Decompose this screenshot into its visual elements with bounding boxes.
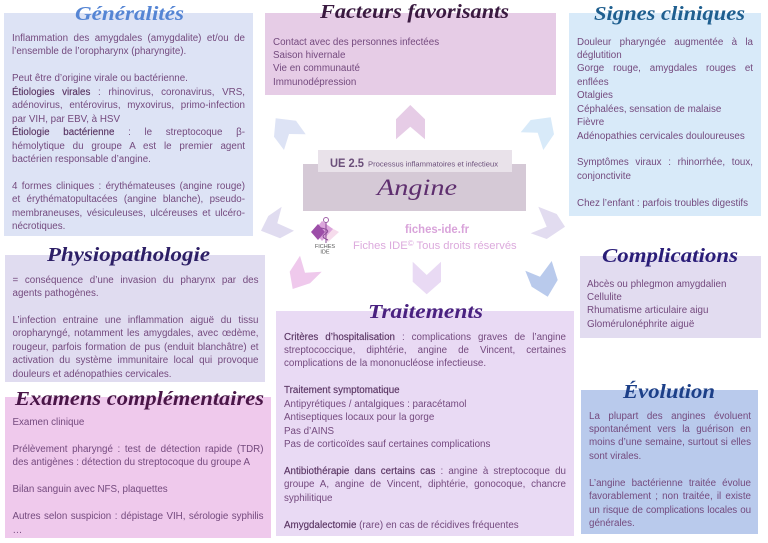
text: Examens complémentaires body: Bilan sanguin avec NFS, plaquettes	[12, 484, 168, 495]
text: Signes cliniques body: Adénopathies cervicales douloureuses	[577, 131, 745, 142]
text: Examens complémentaires body: Prélèvement pharyngé : test de détection rapide (TDR)	[12, 444, 264, 455]
text: Généralités body: adénovirus, entérovirus, myxovirus, primo-infection	[12, 100, 245, 111]
text: Facteurs favorisants body: Immunodépression	[273, 77, 356, 88]
panel: Complications	[580, 245, 761, 338]
heading: Généralités: Généralités	[75, 3, 184, 25]
arrow: bottom centre	[413, 262, 441, 294]
heading: Signes cliniques: Signes cliniques	[594, 3, 745, 25]
arrow: top left	[274, 118, 306, 150]
text: Traitements body: streptococcique, diphtérie, angine de Vincent, certaines	[284, 345, 566, 356]
text: Complications body: Rhumatisme articulaire aigu	[587, 305, 708, 316]
text: Évolution body: favorablement ; non traitée, il existe	[589, 491, 751, 502]
panel: Traitements	[276, 301, 574, 536]
text: Signes cliniques body: Céphalées, sensation de malaise	[577, 104, 721, 115]
arrow: left	[261, 207, 294, 238]
arrow: right	[531, 207, 565, 239]
text: Généralités body: 4 formes cliniques : érythémateuses (angine rouge)	[12, 181, 245, 192]
text: Signes cliniques body: Douleur pharyngée augmentée à la	[577, 36, 753, 48]
text: Facteurs favorisants body: Saison hivernale	[273, 50, 345, 61]
panel: Signes cliniques	[569, 3, 761, 216]
text: Traitements body: Critères d’hospitalisation : complications graves de l’angine	[284, 332, 566, 342]
credit text: Fiches IDE	[353, 240, 408, 252]
text: Complications body: Cellulite	[587, 292, 622, 303]
panel: Examens complémentaires	[5, 388, 271, 538]
text: Généralités body: Inflammation des amygdales (amygdalite) et/ou de	[12, 33, 245, 44]
arrow: top right	[521, 117, 554, 150]
panel: Généralités	[4, 3, 253, 236]
text: Traitements body: Pas d’AINS	[284, 426, 334, 437]
text: Évolution body: La plupart des angines évoluent	[589, 410, 751, 422]
text: Traitements body: syphilitique	[284, 493, 332, 504]
icon: Fiches IDE logo: FICHES	[315, 244, 335, 250]
text: Généralités body: Peut être d’origine virale ou bactérienne.	[12, 73, 188, 84]
text: Généralités body: et érythématopultacées (angine blanche), pseudo-	[12, 194, 245, 205]
credit text	[353, 224, 517, 252]
icon: Fiches IDE logo	[311, 217, 339, 256]
text: Examens complémentaires body: Examen clinique	[12, 417, 84, 428]
text: Signes cliniques body: conjonctivite	[577, 171, 631, 182]
text: Physiopathologie body: L’infection entraine une inflammation aiguë du tissu	[12, 315, 258, 326]
text: Traitements body	[284, 332, 566, 531]
text: Traitements body: groupe A, angine de Vincent, diphtérie, gonocoque, chancre	[284, 479, 566, 490]
text: Généralités body: bactérien responsable d’angine.	[12, 154, 151, 165]
text: Facteurs favorisants body: Vie en communauté	[273, 63, 360, 74]
text: Généralités body: nécrotiques.	[12, 221, 65, 232]
text: Traitements body: Amygdalectomie (rare) en cas de récidives fréquentes	[284, 520, 519, 531]
text: Physiopathologie body: douleurs et adénopathies cervicales.	[12, 369, 172, 380]
text: Évolution body	[589, 410, 751, 529]
text: Évolution body: générales.	[589, 518, 635, 529]
text: Évolution body: sont virales.	[589, 451, 641, 462]
text: Physiopathologie body: rougeur, parfois formation de pus (enduit blanchâtre) et	[12, 342, 258, 353]
text: Traitements body: Pas de corticoïdes sauf certaines complications	[284, 439, 490, 450]
text: Généralités body: hémolytique du groupe A est le premier agent	[12, 140, 245, 152]
panel: Physiopathologie	[5, 244, 265, 382]
panel: Évolution	[581, 380, 758, 534]
text: Généralités body: l’ensemble de l’oropharynx (pharyngite).	[12, 46, 186, 57]
text: Évolution body: L’angine bactérienne traitée évolue	[589, 478, 751, 489]
text: Examens complémentaires body	[12, 417, 264, 536]
heading: Évolution: Évolution	[622, 380, 715, 403]
unit label: UE 2.5	[330, 158, 499, 200]
heading: Facteurs favorisants: Facteurs favorisants	[319, 1, 509, 23]
text: Signes cliniques body: Symptômes viraux : rhinorrhée, toux,	[577, 157, 753, 168]
text: Physiopathologie body: activation du système immunitaire local qui provoque	[12, 355, 258, 366]
text: Complications body: Glomérulonéphrite aiguë	[587, 319, 694, 330]
text: Traitements body: complications de la mononucléose infectieuse.	[284, 358, 486, 369]
text: Signes cliniques body: Chez l’enfant : parfois troubles digestifs	[577, 198, 748, 209]
credit text: Tous droits réservés	[414, 240, 517, 252]
text: Traitements body: Traitement symptomatique	[284, 385, 400, 396]
text: Complications body	[587, 278, 726, 330]
text: Examens complémentaires body: Autres selon suspicion : dépistage VIH, sérologie syphilis	[12, 511, 264, 522]
text: Traitements body: Antipyrétiques / antalgiques : paracétamol	[284, 399, 466, 410]
text: Signes cliniques body: déglutition	[577, 50, 622, 61]
credit text: ©	[408, 239, 414, 248]
arrow: top centre	[396, 105, 425, 139]
text: Examens complémentaires body: …	[12, 524, 22, 536]
text: Généralités body	[12, 33, 245, 232]
icon: Fiches IDE logo: IDE	[320, 250, 330, 256]
text: Traitements body: Antibiothérapie dans certains cas : angine à streptocoque du	[284, 466, 566, 477]
text: Signes cliniques body: Otalgies	[577, 90, 613, 101]
text: Examens complémentaires body: des antigènes : détection du streptocoque du groupe A	[12, 457, 250, 468]
text: Évolution body: un risque de complications locales ou	[589, 505, 751, 516]
credit text: fiches-ide.fr	[405, 224, 470, 236]
unit label: UE 2.5: Processus inflammatoires et infectieux	[368, 162, 499, 168]
heading: Traitements: Traitements	[368, 301, 483, 323]
text: Physiopathologie body: = conséquence d’une invasion du pharynx par des	[12, 274, 258, 286]
text: Physiopathologie body: agents pathogènes.	[12, 288, 99, 299]
text: Signes cliniques body: Gorge rouge, amygdales rouges et	[577, 63, 753, 74]
text: Signes cliniques body: enflées	[577, 77, 609, 88]
text: Généralités body: membraneuses, vésiculeuses, ulcéreuses et ulcéro-	[12, 208, 245, 219]
unit label: UE 2.5: Angine	[375, 175, 457, 200]
unit label: UE 2.5: UE 2.5	[330, 158, 365, 170]
text: Signes cliniques body	[577, 36, 753, 209]
panel: Facteurs favorisants	[265, 1, 556, 95]
text: Facteurs favorisants body: Contact avec des personnes infectées	[273, 36, 439, 48]
text: Évolution body: spontanément vers la guérison en	[589, 424, 751, 435]
text: Facteurs favorisants body	[273, 36, 439, 88]
text: Physiopathologie body	[12, 274, 258, 380]
arrow: bottom right	[525, 261, 558, 297]
text: Signes cliniques body: Fièvre	[577, 117, 604, 128]
heading: Physiopathologie: Physiopathologie	[46, 244, 210, 266]
central title block	[303, 150, 526, 211]
text: Traitements body: Antiseptiques locaux pour la gorge	[284, 412, 434, 423]
text: Évolution body: moins d’une semaine, surtout si elles	[589, 437, 751, 448]
text: Physiopathologie body: oropharyngé, notamment les amygdales, avec œdème,	[12, 328, 258, 339]
text: Généralités body: Étiologies virales : rhinovirus, coronavirus, VRS,	[12, 87, 245, 98]
heading: Examens complémentaires: Examens complémentaires	[14, 388, 264, 410]
arrow: bottom left	[290, 256, 322, 289]
text: Complications body: Abcès ou phlegmon amygdalien	[587, 278, 726, 290]
text: Généralités body: par VIH, par EBV, à HSV	[12, 114, 120, 125]
heading: Complications: Complications	[602, 245, 738, 267]
text: Généralités body: Étiologie bactérienne : le streptocoque β-	[12, 127, 245, 138]
